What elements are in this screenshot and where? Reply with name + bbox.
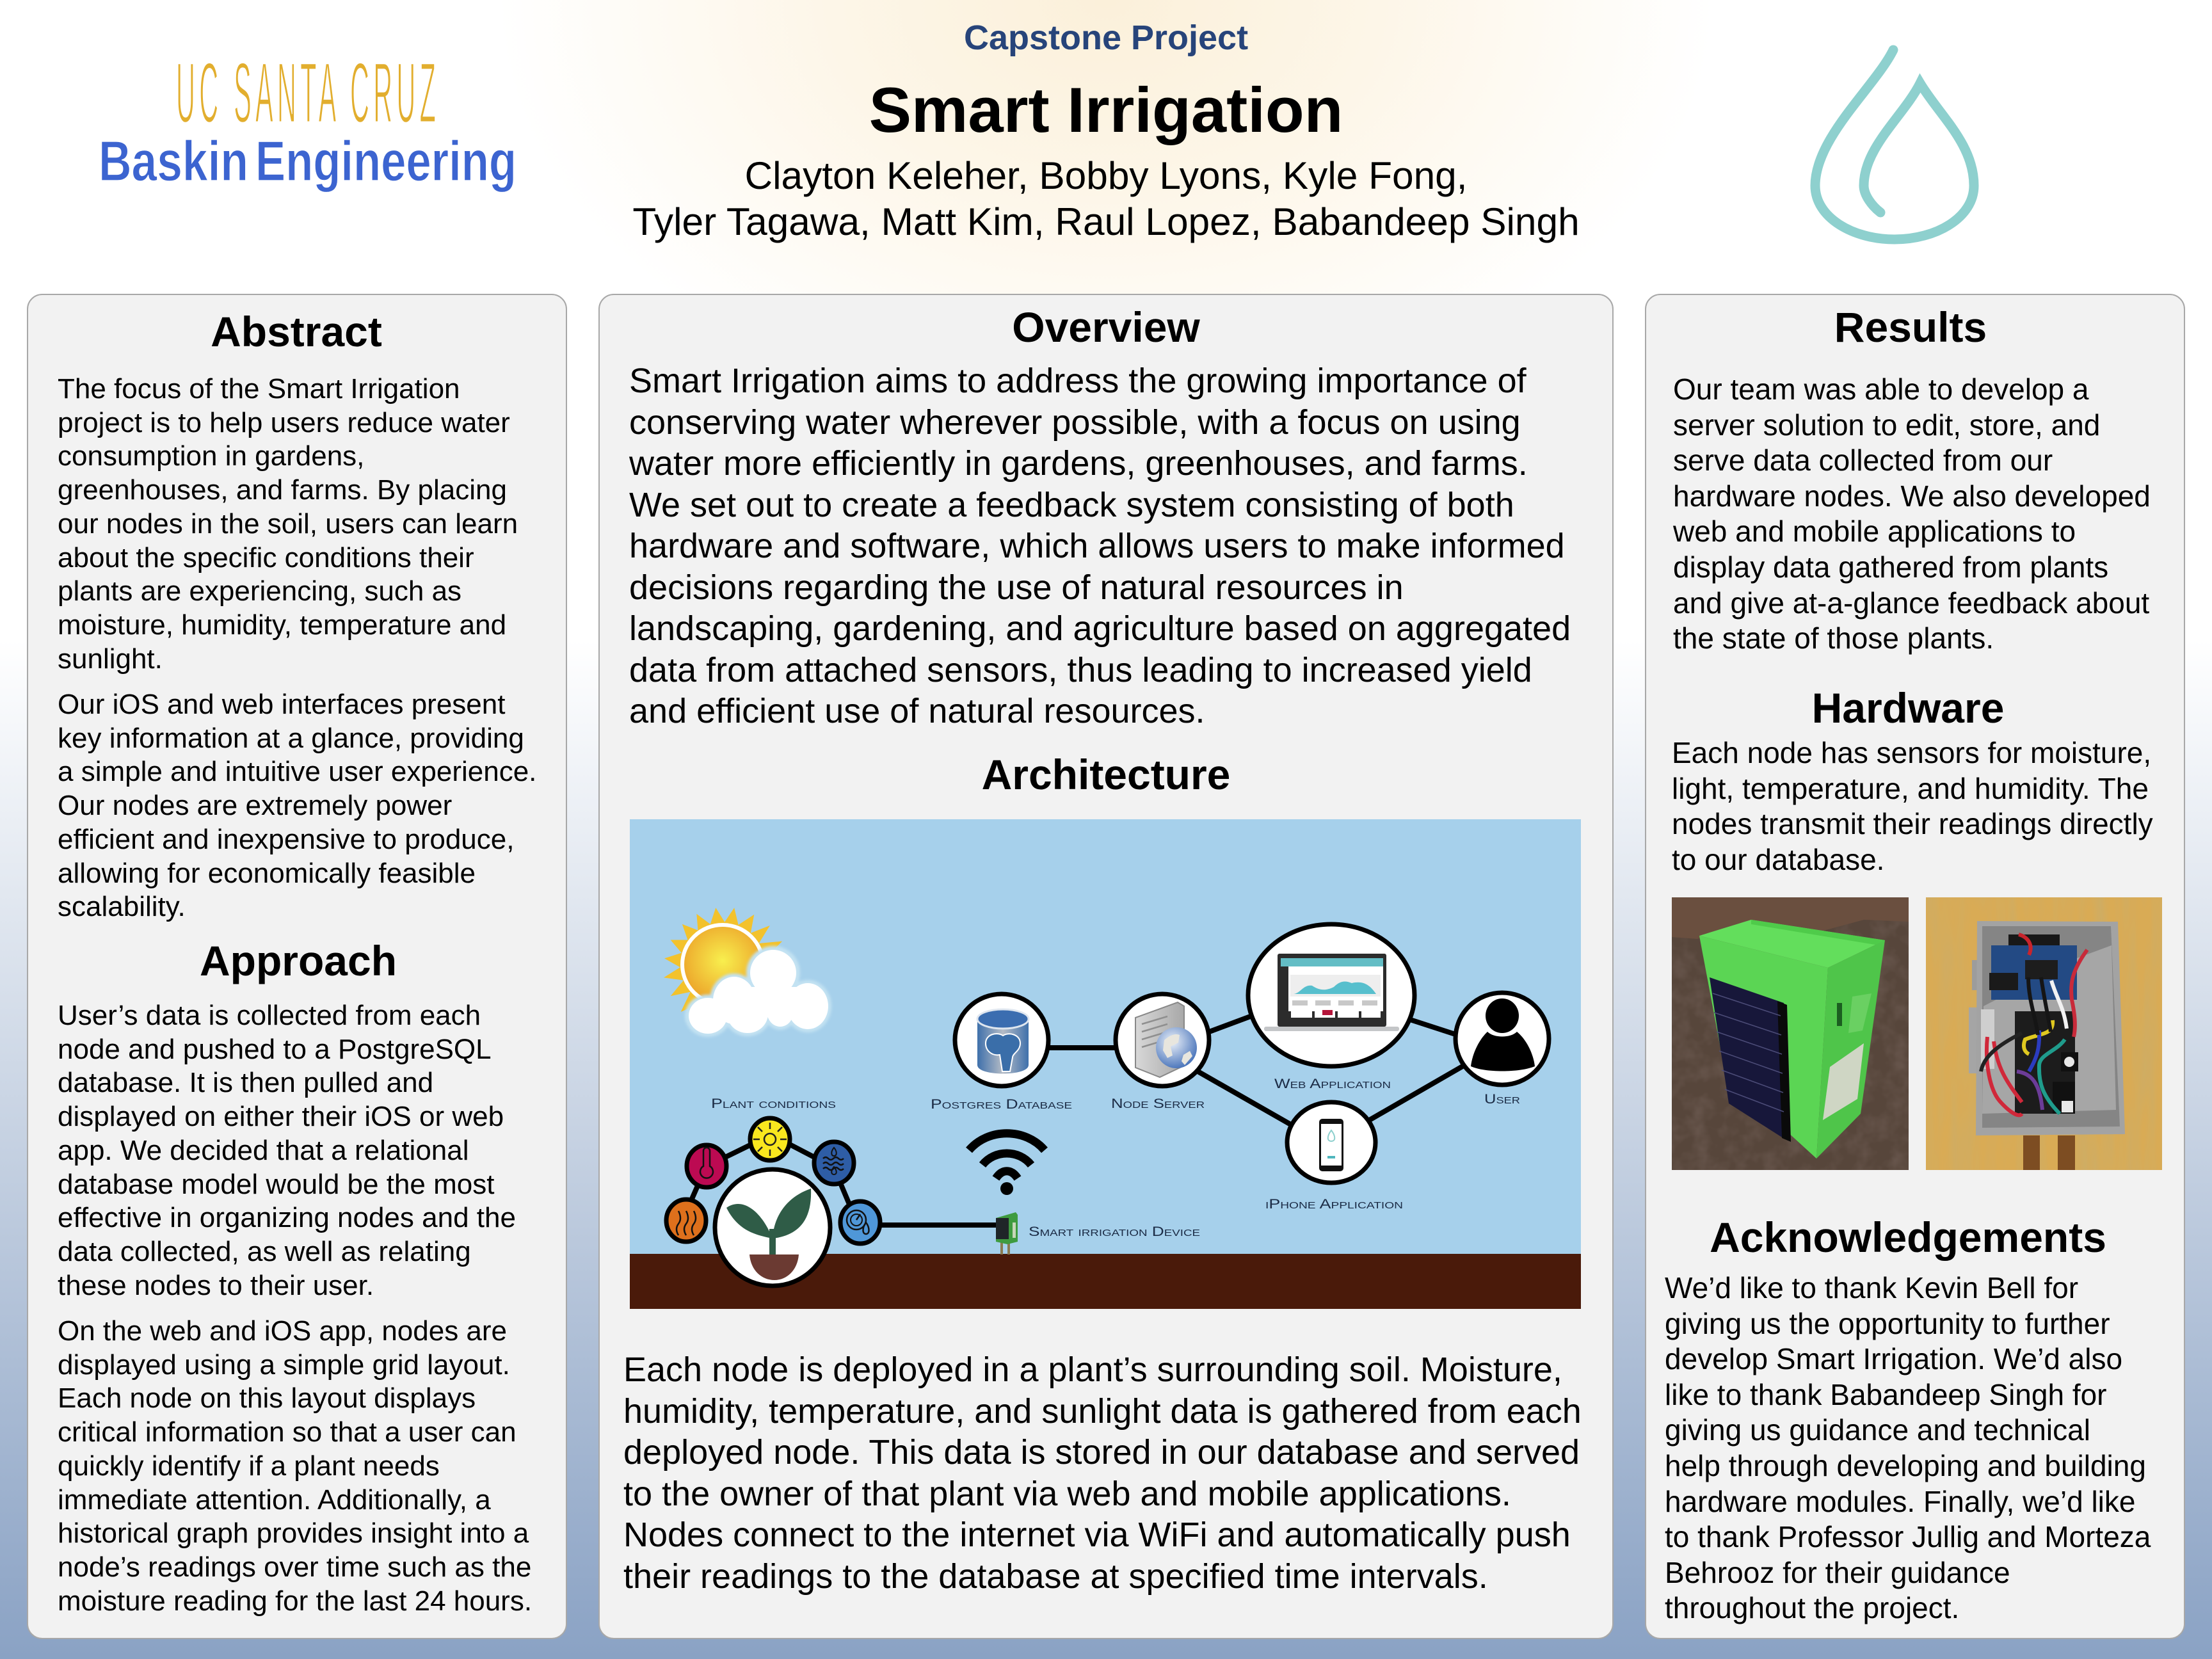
text block: abstract paragraph 1	[58, 373, 518, 675]
text block: results: display data gathered from plants	[1673, 550, 2108, 584]
text block: acknowledgements: like to thank Babandeep Singh for	[1665, 1378, 2107, 1411]
panel: right column	[1645, 294, 2185, 1639]
text block: results: server solution to edit, store, and	[1673, 408, 2100, 442]
text block: results: and give at-a-glance feedback about	[1673, 586, 2149, 620]
icon: sun	[664, 908, 782, 1012]
label: plant conditions: Plant conditions	[711, 1096, 836, 1111]
text block: hardware: to our database.	[1672, 843, 1884, 876]
text block: abstract paragraph 2: key information at a glance, providing	[58, 723, 524, 754]
text block: abstract paragraph 2	[58, 689, 536, 922]
photo: assembled green node in soil	[1672, 897, 1909, 1170]
node: plant	[715, 1169, 830, 1286]
text block: deployment description: Each node is deployed in a plant’s surrounding soil. Moisture,	[623, 1350, 1562, 1389]
heading: Abstract: Abstract	[211, 308, 382, 355]
text block: approach paragraph 2: node’s readings over time such as the	[58, 1551, 531, 1583]
text block: approach paragraph 2: immediate attention. Additionally, a	[58, 1484, 491, 1516]
text block: approach paragraph 1: node and pushed to a PostgreSQL	[58, 1034, 492, 1065]
text block: approach paragraph 2: quickly identify if a plant needs	[58, 1450, 440, 1482]
text block: acknowledgements: help through developing and building	[1665, 1449, 2146, 1482]
text block: acknowledgements	[1665, 1271, 2151, 1624]
node: postgres database	[955, 994, 1048, 1086]
text block: abstract paragraph 1: moisture, humidity, temperature and	[58, 609, 506, 641]
text block: overview	[629, 362, 1571, 730]
label: web application: Web Application	[1274, 1077, 1391, 1091]
text block: overview: conserving water wherever possible, with a focus on using	[629, 403, 1521, 442]
text block: approach paragraph 1: displayed on either their iOS or web	[58, 1101, 504, 1132]
text block: results: serve data collected from our	[1673, 444, 2053, 477]
text block: abstract paragraph 2: Our nodes are extremely power	[58, 790, 452, 821]
icon: moisture gauge	[840, 1201, 880, 1244]
label: iphone application: iPhone Application	[1265, 1197, 1403, 1212]
icon: smart irrigation device	[996, 1212, 1018, 1254]
sky	[630, 819, 1581, 1254]
chart: architecture diagram	[630, 819, 1581, 1309]
text block: results	[1673, 373, 2151, 655]
text block: approach paragraph 1: effective in organizing nodes and the	[58, 1202, 516, 1233]
text block: results: Our team was able to develop a	[1673, 373, 2088, 406]
text block: approach paragraph 2: moisture reading for the last 24 hours.	[58, 1585, 532, 1617]
text block: acknowledgements: develop Smart Irrigation. We’d also	[1665, 1342, 2122, 1375]
heading: Results: Results	[1834, 303, 1987, 351]
label: user: User	[1484, 1092, 1520, 1107]
text block: overview: landscaping, gardening, and agriculture based on aggregated	[629, 609, 1571, 648]
text block: overview: decisions regarding the use of natural resources in	[629, 568, 1404, 607]
connector lines	[690, 1015, 1467, 1225]
title: Smart Irrigation	[869, 75, 1343, 146]
text block: abstract paragraph 1: about the specific conditions their	[58, 542, 474, 573]
text block: abstract paragraph 1: consumption in gardens,	[58, 440, 364, 472]
node: user	[1455, 993, 1549, 1085]
text block: approach paragraph 2	[58, 1315, 532, 1617]
photo: node interior wiring	[1926, 897, 2162, 1170]
text block: deployment description: humidity, temperature, and sunlight data is gathered from each	[623, 1391, 1582, 1430]
logo: UC Santa Cruz Baskin Engineering: Baskin	[99, 129, 248, 193]
label: postgres database: Postgres Database	[931, 1097, 1072, 1112]
node: node server	[1116, 994, 1209, 1086]
text block: acknowledgements: throughout the project.	[1665, 1591, 1959, 1624]
text block: results: hardware nodes. We also developed	[1673, 479, 2151, 513]
text block: overview: water more efficiently in gardens, greenhouses, and farms.	[629, 444, 1528, 483]
text block: overview: Smart Irrigation aims to address the growing importance of	[629, 362, 1527, 400]
heading: Acknowledgements: Acknowledgements	[1710, 1214, 2106, 1261]
node: iphone application	[1287, 1102, 1375, 1183]
text block: abstract paragraph 2: a simple and intuitive user experience.	[58, 756, 536, 787]
text block: overview: hardware and software, which allows users to make informed	[629, 527, 1565, 565]
text block: overview: We set out to create a feedback system consisting of both	[629, 485, 1514, 524]
text block: results: the state of those plants.	[1673, 621, 1994, 655]
text block: abstract paragraph 1: The focus of the Smart Irrigation	[58, 373, 460, 405]
subtitle: Capstone Project: Capstone Project	[964, 19, 1248, 57]
text block: approach paragraph 1: database. It is then pulled and	[58, 1067, 433, 1098]
icon: cloud	[685, 946, 831, 1037]
heading: Architecture: Architecture	[982, 751, 1230, 798]
text block: acknowledgements: giving us guidance and technical	[1665, 1413, 2090, 1447]
text block: results: web and mobile applications to	[1673, 515, 2076, 548]
panel: center column	[598, 294, 1614, 1639]
text block: acknowledgements: We’d like to thank Kevin Bell for	[1665, 1271, 2078, 1304]
node: web application	[1248, 924, 1415, 1066]
icon: temperature	[687, 1145, 726, 1187]
icon: sunlight	[750, 1118, 790, 1160]
heading: Overview: Overview	[1012, 303, 1200, 351]
text block: abstract paragraph 1: project is to help users reduce water	[58, 407, 510, 438]
text block: acknowledgements: to thank Professor Jullig and Morteza	[1665, 1520, 2151, 1553]
text block: hardware: nodes transmit their readings directly	[1672, 807, 2153, 840]
icon: wifi	[969, 1134, 1045, 1195]
text block: approach paragraph 2: critical information so that a user can	[58, 1416, 517, 1448]
label: node server: Node Server	[1111, 1096, 1205, 1111]
heading: Approach: Approach	[200, 937, 397, 984]
label: smart irrigation device: Smart irrigation Device	[1029, 1224, 1200, 1239]
ground	[630, 1254, 1581, 1309]
text block: deployment description: their readings to the database at specified time intervals.	[623, 1557, 1488, 1595]
text block: approach paragraph 2: Each node on this layout displays	[58, 1382, 476, 1414]
icon: humidity	[814, 1142, 854, 1184]
text block: approach paragraph 1: these nodes to their user.	[58, 1270, 374, 1301]
text block: acknowledgements: Behrooz for their guidance	[1665, 1556, 2010, 1589]
text block: deployment description: deployed node. This data is stored in our database and served	[623, 1433, 1580, 1471]
icon: heat	[666, 1199, 706, 1242]
text block: abstract paragraph 2: Our iOS and web interfaces present	[58, 689, 505, 720]
text block: approach paragraph 1: data collected, as well as relating	[58, 1236, 471, 1267]
panel: left column	[27, 294, 567, 1639]
text block: approach paragraph 1: database model would be the most	[58, 1169, 494, 1200]
text block: approach paragraph 2: On the web and iOS app, nodes are	[58, 1315, 507, 1347]
text block: acknowledgements: giving us the opportunity to further	[1665, 1307, 2110, 1340]
text block: deployment description: to the owner of that plant via web and mobile applications.	[623, 1475, 1511, 1513]
heading: Hardware: Hardware	[1812, 684, 2004, 732]
text block: approach paragraph 2: historical graph provides insight into a	[58, 1518, 529, 1549]
text block: hardware: Each node has sensors for moisture,	[1672, 736, 2151, 769]
text block: abstract paragraph 2: scalability.	[58, 891, 186, 922]
text block: abstract paragraph 2: efficient and inexpensive to produce,	[58, 824, 514, 855]
text block: overview: data from attached sensors, thus leading to increased yield	[629, 650, 1532, 689]
icon: water drop logo	[1810, 45, 1979, 244]
text block: abstract paragraph 1: plants are experiencing, such as	[58, 575, 461, 607]
authors: Clayton Keleher, Bobby Lyons, Kyle Fong,	[744, 154, 1468, 197]
text block: deployment description	[623, 1350, 1582, 1595]
text block: abstract paragraph 1: sunlight.	[58, 643, 163, 675]
authors	[632, 154, 1580, 243]
authors: Tyler Tagawa, Matt Kim, Raul Lopez, Babandeep Singh	[632, 200, 1580, 243]
text block: hardware: light, temperature, and humidity. The	[1672, 772, 2149, 805]
text block: approach paragraph 1	[58, 1000, 516, 1301]
text block: abstract paragraph 2: allowing for economically feasible	[58, 858, 476, 889]
text block: approach paragraph 2: displayed using a simple grid layout.	[58, 1349, 510, 1381]
text block: abstract paragraph 1: greenhouses, and farms. By placing	[58, 474, 507, 506]
text block: hardware	[1672, 736, 2153, 876]
text block: deployment description: Nodes connect to the internet via WiFi and automatically push	[623, 1516, 1571, 1554]
text block: acknowledgements: hardware modules. Finally, we’d like	[1665, 1485, 2135, 1518]
text block: abstract paragraph 1: our nodes in the soil, users can learn	[58, 508, 518, 540]
text block: approach paragraph 1: app. We decided that a relational	[58, 1135, 469, 1166]
text block: overview: and efficient use of natural resources.	[629, 692, 1205, 730]
logo: UC Santa Cruz Baskin Engineering	[99, 51, 517, 193]
text block: approach paragraph 1: User’s data is collected from each	[58, 1000, 481, 1031]
